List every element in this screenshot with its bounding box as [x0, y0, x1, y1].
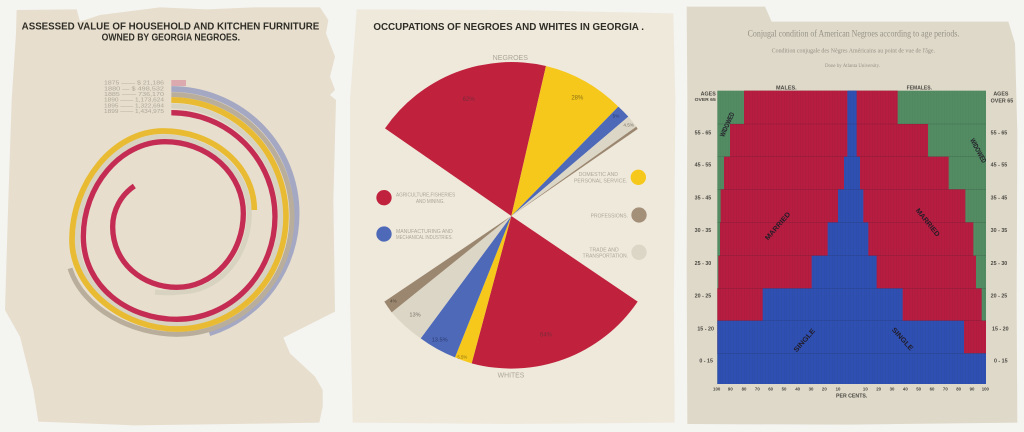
panel: conjugal condition chart	[687, 7, 1017, 425]
percent axis: 40	[795, 386, 801, 391]
pie: Negroes sectors: 62%	[463, 97, 475, 103]
title: OWNED BY GEORGIA NEGROES.	[102, 32, 240, 43]
percent axis	[713, 386, 990, 391]
pie: Whites sectors: 13.5%	[432, 337, 448, 343]
axis title: PER CENTS.	[836, 394, 868, 400]
pie: Negroes sectors	[385, 62, 638, 216]
left age labels: 20 - 25	[695, 294, 711, 300]
percent axis: 70	[755, 386, 760, 391]
legend: years and values: 1890 —— 1,173,624	[104, 98, 164, 104]
legend: professions: PROFESSIONS.	[591, 213, 628, 219]
percent axis: 30	[809, 386, 814, 391]
panel: occupations pie	[350, 9, 675, 424]
percent axis: 50	[782, 386, 787, 391]
legend: domestic service	[574, 170, 646, 185]
left age labels: 45 - 55	[695, 163, 711, 169]
percent axis: 90	[728, 386, 733, 391]
title block: Condition conjugale des Nègres Américains au point de vue de l'âge.	[772, 48, 935, 54]
percent axis: 100	[982, 386, 990, 391]
left age labels: 55 - 65	[695, 130, 711, 136]
stepped population chart	[717, 91, 986, 384]
right age labels: 55 - 65	[991, 130, 1007, 136]
left age labels	[695, 92, 716, 365]
chart labels: WIDOWED	[968, 138, 987, 164]
right age labels: AGES	[993, 92, 1009, 98]
panel: household furniture spiral	[5, 7, 336, 425]
percent axis: 30	[890, 386, 895, 391]
percent axis: 100	[713, 386, 721, 391]
chart labels: SINGLE	[793, 327, 817, 354]
title block: Conjugal condition of American Negroes according to age periods.	[748, 29, 959, 39]
chart labels: WIDOWED	[719, 112, 736, 138]
pie: Whites sectors: 4%	[390, 299, 397, 304]
percent axis: 60	[930, 386, 935, 391]
title	[22, 21, 320, 43]
legend: trade: TRADE AND	[589, 247, 619, 253]
right age labels: 0 - 15	[994, 359, 1008, 365]
legend: years and values	[104, 81, 164, 115]
pie: Whites sectors	[384, 216, 638, 369]
left age labels: 35 - 45	[695, 195, 711, 201]
chart labels: MARRIED	[764, 211, 792, 242]
percent axis: 90	[970, 386, 975, 391]
legend: trade	[583, 245, 647, 260]
legend: years and values: 1885 —— 736,170	[104, 92, 164, 98]
title: OCCUPATIONS OF NEGROES AND WHITES IN GEORGIA .	[373, 22, 644, 33]
spiral chart	[70, 80, 297, 334]
percent axis: 60	[768, 386, 774, 391]
legend: domestic service: DOMESTIC AND	[579, 172, 618, 178]
legend: years and values: 1875 —— $ 21,186	[104, 81, 164, 87]
right age labels: 35 - 45	[991, 195, 1007, 201]
percent axis: 20	[876, 386, 882, 391]
right age labels: 15 - 20	[992, 326, 1009, 332]
paper sheet	[687, 7, 1017, 425]
legend: agriculture: AGRICULTURE,FISHERIES	[396, 193, 456, 199]
percent axis: 80	[742, 386, 747, 391]
legend: years and values: 1899 —— 1,434,975	[104, 109, 164, 115]
percent axis: 50	[916, 386, 922, 391]
left age labels: 30 - 35	[695, 228, 711, 234]
legend: manufacturing: MANUFACTURING AND	[396, 229, 453, 235]
title block: Done by Atlanta University.	[825, 64, 880, 69]
legend: years and values: 1895 —— 1,322,694	[104, 103, 164, 109]
chart labels	[719, 112, 987, 354]
legend: years and values: 1880 — $ 498,532	[104, 86, 164, 92]
percent axis: 20	[822, 386, 827, 391]
percent axis: 70	[943, 386, 948, 391]
title: ASSESSED VALUE OF HOUSEHOLD AND KITCHEN FURNITURE	[22, 21, 320, 32]
left age labels: 15 - 20	[697, 326, 714, 332]
left age labels: 0 - 15	[699, 359, 713, 365]
percent axis: 40	[903, 386, 908, 391]
right age labels: 45 - 55	[991, 163, 1007, 169]
legend: agriculture: AND MINING.	[416, 199, 445, 205]
heading: males: MALES.	[776, 85, 797, 91]
left age labels: 25 - 30	[695, 261, 711, 267]
pie: Whites sectors: 13%	[409, 313, 421, 319]
right age labels	[991, 92, 1013, 365]
right age labels: 20 - 25	[991, 294, 1007, 300]
left age labels: OVER 65	[695, 97, 716, 103]
legend: domestic service: PERSONAL SERVICE.	[574, 178, 627, 184]
right age labels: 30 - 35	[991, 228, 1007, 234]
right age labels: OVER 65	[991, 99, 1013, 105]
chart labels: MARRIED	[914, 208, 941, 238]
chart labels: SINGLE	[890, 327, 914, 353]
legend: manufacturing: MECHANICAL INDUSTRIES.	[396, 235, 453, 241]
pie: Negroes sectors: 5%	[613, 114, 619, 119]
paper sheet	[350, 9, 675, 424]
percent axis: 10	[863, 386, 868, 391]
left age labels: AGES	[701, 92, 716, 98]
pie: Whites sectors: 5.5%	[457, 355, 467, 360]
pie: Negroes sectors: 4.5%	[623, 123, 634, 128]
legend: professions	[591, 207, 647, 223]
heading: females: FEMALES.	[907, 85, 932, 91]
right age labels: 25 - 30	[991, 261, 1007, 267]
heading: Negroes: NEGROES	[493, 53, 528, 62]
legend: manufacturing	[376, 226, 453, 242]
legend: trade: TRANSPORTATION.	[583, 254, 628, 260]
pie: Whites sectors: 64%	[540, 333, 553, 339]
percent axis: 80	[956, 386, 962, 391]
title block	[748, 29, 959, 69]
pie: Negroes sectors: 28%	[571, 95, 584, 101]
percent axis: 10	[836, 386, 841, 391]
heading: Whites: WHITES	[498, 370, 524, 379]
legend: agriculture	[376, 190, 456, 205]
torn paper sheet	[5, 7, 336, 425]
